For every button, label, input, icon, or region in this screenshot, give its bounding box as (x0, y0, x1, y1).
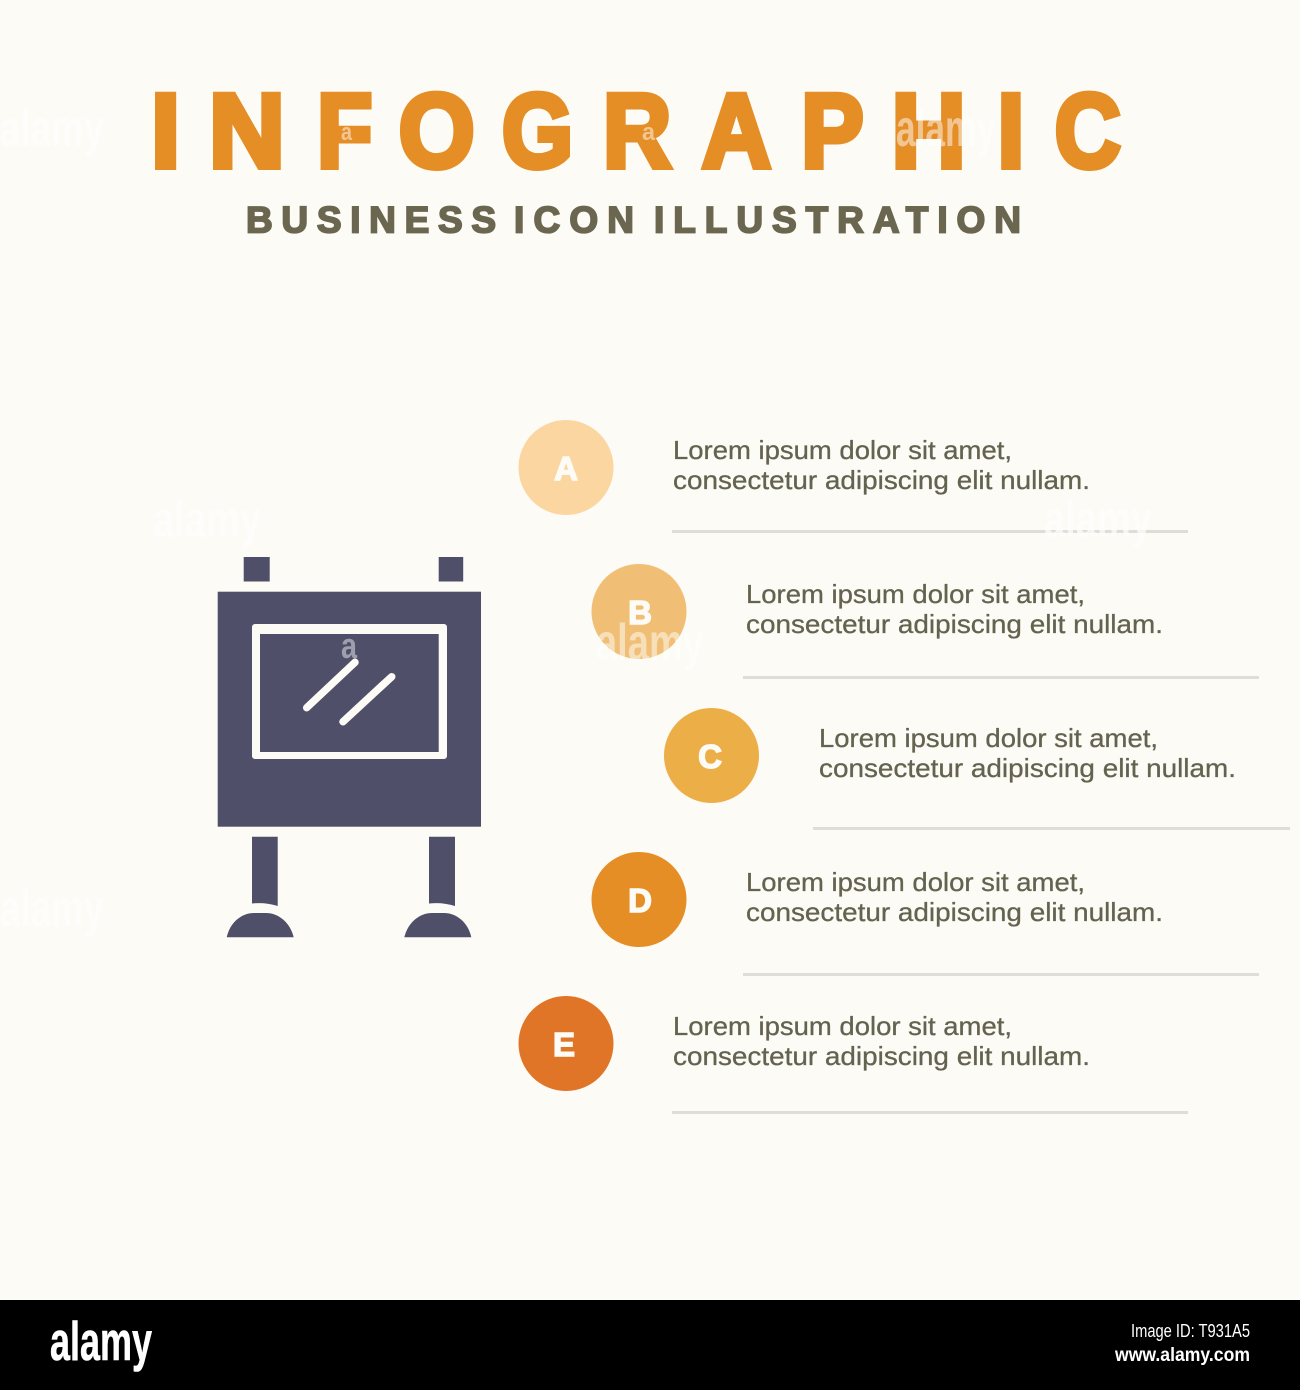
title: R (603, 73, 671, 190)
website: www.alamy.com (1114, 1345, 1250, 1366)
title: P (801, 73, 864, 190)
badge E: E (553, 1026, 575, 1063)
badge D (592, 852, 686, 947)
subtitle: BUSINESS (246, 200, 496, 240)
watermarks: alamy (0, 100, 104, 158)
watermarks: a (341, 625, 358, 666)
text E: Lorem ipsum dolor sit amet, (673, 1011, 1012, 1041)
text D: Lorem ipsum dolor sit amet, (746, 867, 1085, 897)
watermarks (0, 100, 1152, 938)
icon: signboard (218, 557, 481, 937)
title: O (399, 73, 475, 190)
subtitle: ILLUSTRATION (654, 200, 1021, 240)
footer bar (0, 1300, 1300, 1390)
title: C (1055, 72, 1121, 189)
watermarks: alamy (153, 491, 261, 549)
title (151, 72, 1121, 190)
watermarks: alamy (596, 614, 704, 672)
badge D: D (628, 882, 652, 919)
text A: Lorem ipsum dolor sit amet, (673, 435, 1012, 465)
subtitle: ICON (514, 200, 634, 240)
watermarks: alamy (1044, 491, 1152, 549)
subtitle (246, 200, 1021, 240)
watermarks: alamy (896, 100, 996, 158)
step E (518, 996, 1188, 1114)
text B: Lorem ipsum dolor sit amet, (746, 579, 1085, 609)
title: G (502, 72, 573, 189)
title: A (702, 73, 771, 190)
text D (746, 867, 1163, 927)
text C: Lorem ipsum dolor sit amet, (819, 723, 1158, 753)
icon part: glare lines (307, 662, 392, 722)
text A (673, 435, 1090, 495)
badge A: A (554, 450, 578, 487)
text C (819, 723, 1236, 783)
title: F (317, 72, 372, 190)
badge C (664, 708, 759, 803)
step A (518, 420, 1188, 533)
watermarks: a (642, 119, 656, 146)
badge C: C (698, 738, 722, 775)
watermarks: a (341, 119, 353, 146)
step D (592, 852, 1259, 976)
title: I (151, 73, 180, 190)
text B (746, 579, 1163, 639)
icon part: legs (252, 837, 455, 906)
text A: consectetur adipiscing elit nullam. (673, 465, 1090, 495)
step C (664, 708, 1290, 830)
badge E (518, 996, 614, 1091)
text C: consectetur adipiscing elit nullam. (819, 753, 1236, 783)
icon part: screen frame (252, 624, 447, 759)
badge A (518, 420, 614, 515)
icon part: board (218, 592, 481, 827)
text B: consectetur adipiscing elit nullam. (746, 609, 1163, 639)
title: I (998, 73, 1024, 190)
icon part: top tabs (244, 557, 463, 582)
image id: Image ID: T931A5 (1131, 1321, 1250, 1341)
footer logo: alamy (50, 1310, 152, 1372)
title: H (892, 73, 966, 190)
text D: consectetur adipiscing elit nullam. (746, 897, 1163, 927)
text E: consectetur adipiscing elit nullam. (673, 1041, 1090, 1071)
step B (592, 564, 1259, 679)
badge B: B (628, 594, 652, 631)
watermarks: alamy (0, 880, 104, 938)
icon part: feet (227, 913, 471, 937)
title: N (209, 73, 285, 190)
text E (673, 1011, 1090, 1071)
badge B (592, 564, 686, 659)
